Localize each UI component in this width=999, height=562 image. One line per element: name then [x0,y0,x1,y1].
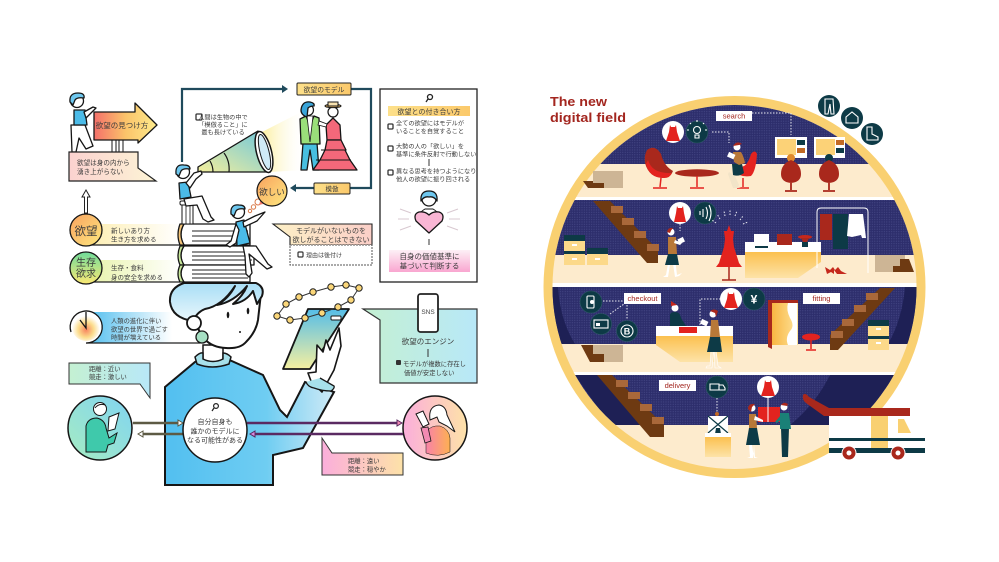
callout: no model no desire [273,224,372,265]
icon: bead ring [274,282,362,323]
callout: far distance: 距離：遠い [348,456,379,465]
icon: fitting room door [768,300,798,349]
panel: digital field building [540,94,930,478]
callout: no model no desire: モデルがいないものを [296,226,366,235]
callout: own value standard: 自身の価値基準に [400,251,460,261]
person: customer [700,310,722,368]
floor 3: checkout [580,288,895,368]
panel: dealing with desire: 全ての欲望にはモデルが [396,120,465,128]
text: humans imitate [196,114,248,136]
heading: imitation label [314,183,350,194]
floor 2: store [564,201,914,280]
label: delivery [659,380,696,391]
callout: desire does not well up [69,152,156,181]
callout: center could be model: 自分自身も [198,417,232,426]
icon: boot [861,123,883,145]
callout: desire does not well up: 欲望は身の内から [77,158,130,167]
icon: red armchair [733,152,757,188]
icon: card circle [590,314,612,334]
band: desire: 生き方を求める [111,234,156,244]
panel: dealing with desire: 他人の欲望に振り回される [396,176,470,184]
callout: center could be model [183,398,247,462]
title: digital field [550,110,626,125]
title [550,94,626,125]
panel: engine of desire [363,294,477,383]
person: seated pointing [226,205,272,277]
callout: far distance: 競走：穏やか [348,464,386,474]
arrow: right exchange [247,420,403,437]
band: desire: 新しいあり方 [111,226,150,235]
panel: dealing with desire: 基準に条件反射で行動しない [396,150,476,158]
floors [540,100,930,425]
dotted connectors [712,113,791,143]
signal dots around mannequin [712,210,748,224]
icon: red heels [825,267,847,274]
person: delivery worker [775,403,791,457]
icon: small steps [583,171,623,188]
callout: near distance [69,363,150,398]
band: evolution and clock [70,311,200,343]
frame arrow: observe model loop [182,85,371,192]
person: seated with telescope [176,165,214,224]
icon: yen circle [743,288,765,310]
band: survival needs: 身の安全を求める [111,272,163,282]
person: shopper with tablet [663,228,685,277]
text: humans imitate: 人間は生物の中で [198,114,248,122]
panel: dealing with desire [380,89,477,282]
icon: right person circle [403,396,467,460]
icon: yen circle: ¥ [751,292,758,306]
panel: dealing with desire: 欲望との付き合い方 [398,107,460,116]
callout: own value standard [389,250,470,272]
icon: signboard arrow: 欲望の見つけ方 [96,120,149,130]
icon: desk chairs with people [781,154,839,191]
label: search [716,111,752,121]
icon: delivery truck [803,394,925,460]
panel: engine of desire: 価値が安定しない [404,368,454,377]
icon: dress circle [669,202,691,224]
icon: gift box [758,398,780,422]
callout: far distance [322,438,403,475]
icon: stacked books [178,224,254,282]
band: desire [70,214,180,246]
icon: person with heart [398,191,460,233]
icon: display counter [745,234,821,278]
icon: red side table [802,334,820,350]
label: checkout: checkout [627,294,658,303]
speech bubble: want: 欲しい [259,187,285,197]
callout: center could be model: なる可能性がある [187,436,243,444]
panel: dealing with desire: 大勢の人の「欲しい」を [396,142,464,150]
label: delivery: delivery [665,381,691,390]
product icons: top right [818,95,883,145]
icon: storage boxes [868,320,889,350]
heading: imitation label: 模倣 [326,184,339,193]
icon: storage boxes [564,235,608,265]
icon: checkout counter [656,326,733,362]
label: checkout [624,293,661,304]
label: fitting: fitting [813,294,830,303]
icon: trousers [818,95,840,117]
label: fitting [803,293,840,304]
panel: engine of desire: 欲望のエンジン [402,336,454,346]
icon: bulb circle [686,120,708,143]
text: humans imitate: 最も長けている [201,130,245,136]
icon: clock [70,311,102,343]
icon: coffee table [675,169,719,188]
arrow: left exchange [133,420,183,437]
icon: dress circle [662,121,684,143]
band: desire: 欲望 [74,224,98,238]
band: survival needs: 生存 [76,256,96,269]
ring background [544,96,926,478]
panel: dealing with desire: いることを自覚すること [396,128,464,136]
icon: smartphone in hand [283,309,349,392]
icon: parcel on stand [705,412,731,457]
band: survival needs [70,252,180,284]
icon: small steps [875,255,914,272]
icon: staircase [597,375,664,437]
person: sitting with tablet [727,142,745,188]
callout: own value standard: 基づいて判断する [400,260,459,270]
icon: clothes rack [817,208,868,273]
title: The new [550,94,608,109]
heading: model label: 欲望のモデル [304,85,345,94]
person: receiving customer [746,404,763,458]
floor 4: delivery [597,375,925,460]
callout: near distance: 競走：激しい [89,372,127,381]
icon: small steps [581,345,623,362]
icon: staircase [593,201,659,263]
icon: truck circle [706,376,728,398]
icon: signboard arrow [94,103,157,153]
icon: phone payment circle [580,291,602,313]
icon: bag [841,107,863,129]
band: survival needs: 欲求 [76,267,96,280]
icon: bitcoin circle: B [624,326,631,336]
head and hair [170,283,263,348]
speech bubble: want [248,176,287,213]
person: clerk [670,301,686,326]
callout: no model no desire: 欲しがることはできない [292,235,370,244]
callout: no model no desire: 理由は後付け [306,252,342,260]
callout: desire does not well up: 湧き上がらない [77,167,124,176]
icon: wave circle [694,202,716,224]
icon: model couple [300,102,357,170]
panel: dealing with desire: 異なる思考を持つようになり [396,168,476,176]
band: survival needs: 生存・食料 [111,263,144,272]
label: search: search [723,112,745,120]
panel: engine of desire: モデルが複数に存在し [403,359,466,368]
band: evolution and clock: 欲望の世界で過ごす [111,324,168,334]
callout: center could be model: 誰かのモデルに [190,426,240,436]
text: humans imitate: 「模倣ること」に [198,121,248,129]
heading: model label [297,83,351,95]
icon: dress circle [720,288,742,310]
icon: dress circle [757,376,779,398]
arrow: up [82,190,90,213]
icon: staircase [830,288,895,350]
panel: desire illustration [68,83,477,485]
icon: telescope [198,130,276,174]
floor 1: search [583,111,845,191]
band: evolution and clock: 時間が増えている [111,332,161,342]
icon: mannequin with dress [716,225,742,280]
callout: near distance: 距離：近い [89,364,120,373]
panel: engine of desire: SNS [421,309,435,316]
figure: central person [165,283,334,485]
icon: screens [775,137,845,158]
wall shadows [550,287,575,344]
band: evolution and clock: 人類の進化に伴い [111,316,161,325]
icon: lounge chair [645,148,673,188]
light cone from telescope [262,112,304,172]
person: pointing signboard [70,93,96,152]
icon: bitcoin circle [616,320,638,342]
icon: left person circle [68,396,132,460]
